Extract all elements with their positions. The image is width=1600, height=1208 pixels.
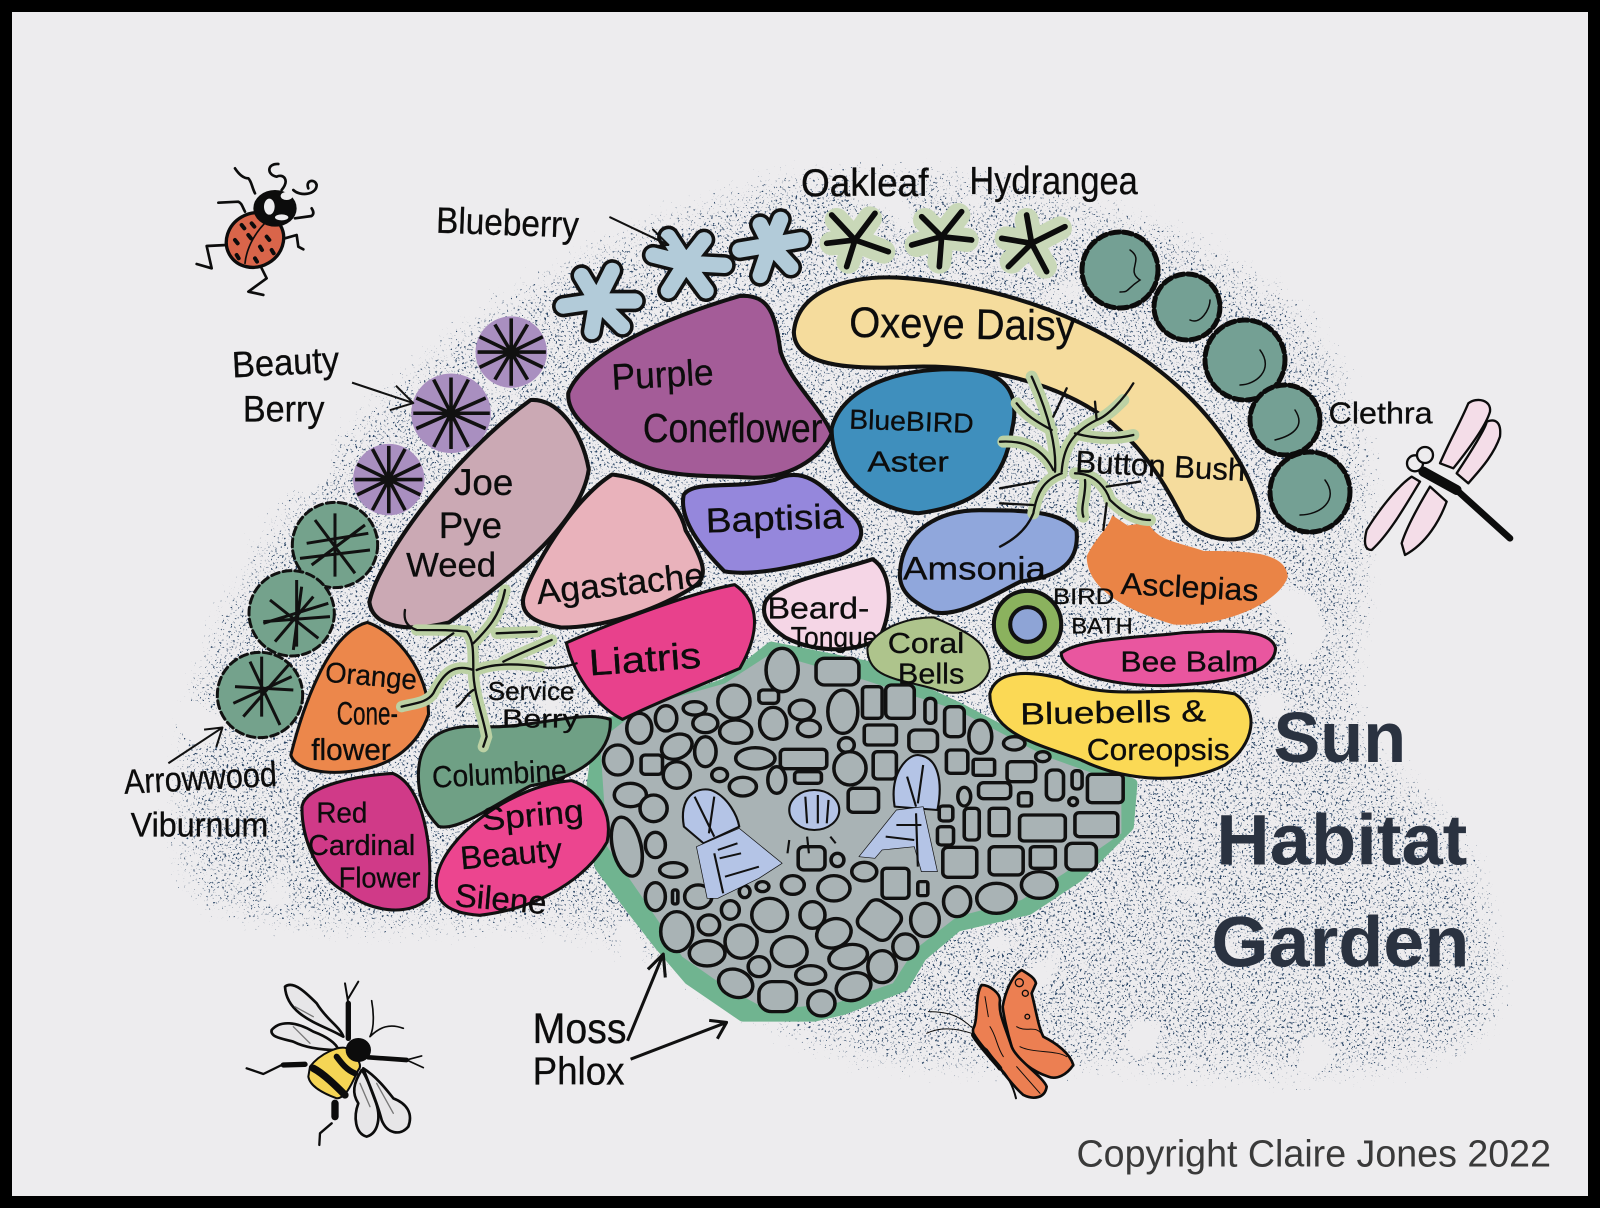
- bed: Bluebird Aster: Aster: [867, 446, 950, 478]
- bed: Red Cardinal Flower: [302, 773, 430, 910]
- bed: Joe Pye Weed: [369, 400, 589, 627]
- bed: Bluebird Aster: [832, 369, 1014, 513]
- bed: Bluebird Aster: BlueBIRD: [849, 404, 974, 439]
- title: Sun: [1273, 698, 1406, 778]
- bed: Purple Coneflower: Purple: [611, 351, 715, 398]
- bed: Spring Beauty Silene: Beauty: [459, 831, 564, 876]
- bed: Joe Pye Weed: Weed: [406, 547, 496, 585]
- left chair: [683, 789, 782, 898]
- label: Moss Phlox with arrows: [533, 954, 727, 1094]
- icon: dragonfly: [1365, 400, 1510, 555]
- shrubs: Beauty Berry: Beauty: [231, 339, 341, 386]
- bird bath: BATH: [1071, 614, 1133, 639]
- bed: Red Cardinal Flower: Flower: [339, 863, 421, 895]
- bed: Bee Balm: Bee Balm: [1120, 646, 1258, 678]
- bed: Amsonia: [900, 510, 1077, 613]
- icon: ladybug: [197, 164, 317, 295]
- shrub: Service Berry branches: [402, 590, 577, 747]
- garden furniture: chairs and table: [683, 755, 940, 898]
- shrubs: Blueberry: Blueberry: [435, 200, 580, 246]
- bed: Red Cardinal Flower: Red: [316, 797, 367, 829]
- label: Service Berry: Berry: [502, 706, 579, 734]
- bed: Purple Coneflower: [568, 296, 832, 478]
- bed: Red Cardinal Flower: Cardinal: [308, 830, 415, 862]
- shrubs: Clethra bushes: [1082, 232, 1350, 532]
- shrubs: Beauty Berry: Berry: [243, 388, 325, 429]
- bed: Agastache: Agastache: [535, 557, 706, 612]
- bed: Coral Bells: Bells: [898, 659, 964, 691]
- label: Oakleaf Hydrangea: Hydrangea: [969, 160, 1138, 203]
- bed: Asclepias: [1087, 515, 1288, 625]
- bed: Coral Bells: [867, 617, 990, 693]
- title: Habitat: [1216, 800, 1467, 880]
- bird bath: [994, 584, 1133, 658]
- bed: Liatris: [566, 585, 755, 719]
- label: Moss Phlox with arrows: Moss: [533, 1005, 627, 1053]
- shrubs: Blueberry: [435, 200, 801, 332]
- title: Garden: [1211, 902, 1469, 982]
- shrub: Button Bush branches: [1000, 377, 1150, 547]
- bed: Orange Coneflower: Orange: [324, 657, 418, 697]
- shrubs: Arrowwood Viburnum bushes: [217, 502, 378, 738]
- right chair: [859, 755, 940, 872]
- label: Arrowwood Viburnum: [123, 728, 278, 845]
- bed: Columbine: [418, 716, 610, 827]
- bed: Oxeye Daisy: Oxeye Daisy: [849, 299, 1077, 351]
- shrubs: Oakleaf Hydrangea stars: [827, 212, 1065, 272]
- shrubs: Beauty Berry: [231, 316, 547, 515]
- bed: Coral Bells: Coral: [888, 628, 964, 660]
- label: Oakleaf Hydrangea: Oakleaf: [801, 162, 929, 205]
- stone wash: [600, 653, 1121, 1010]
- bed: Joe Pye Weed: Joe: [454, 462, 513, 503]
- label: Moss Phlox with arrows: Phlox: [533, 1051, 624, 1094]
- bed: Bee Balm: [1061, 631, 1276, 686]
- bed: Joe Pye Weed: Pye: [439, 505, 502, 546]
- moss phlox ground: [589, 647, 1132, 1017]
- bed: Orange Coneflower: flower: [311, 733, 391, 767]
- bed: Baptisia: [683, 475, 861, 573]
- label: Oakleaf Hydrangea: [801, 160, 1138, 205]
- bed: Beardtongue: [764, 559, 889, 654]
- icon: bumble bee: [247, 982, 423, 1145]
- label: Arrowwood Viburnum: Arrowwood: [123, 756, 278, 802]
- bed: Purple Coneflower: Coneflower: [643, 405, 822, 451]
- bed: Columbine: Columbine: [431, 754, 568, 795]
- bed: Oxeye Daisy: [794, 277, 1258, 540]
- bird bath: BIRD: [1053, 584, 1114, 609]
- bed: Liatris: Liatris: [587, 635, 702, 683]
- table: [787, 790, 839, 853]
- bed: Beardtongue: Beard-: [767, 591, 869, 625]
- label: Service Berry: Service: [488, 678, 574, 706]
- label: Clethra: Clethra: [1329, 396, 1434, 430]
- bed: Agastache: [523, 474, 706, 628]
- title: [1211, 698, 1469, 982]
- label: Service Berry: [488, 678, 579, 734]
- bed: Orange Coneflower: Cone-: [337, 694, 398, 731]
- label: Button Bush: Button Bush: [1075, 444, 1246, 488]
- bed: Bluebells and Coreopsis: [990, 673, 1251, 778]
- label: Arrowwood Viburnum: Viburnum: [131, 807, 268, 845]
- bed: Spring Beauty Silene: Spring: [480, 792, 585, 838]
- bed: Bluebells and Coreopsis: Coreopsis: [1087, 733, 1230, 767]
- bed: Amsonia: Amsonia: [903, 550, 1047, 587]
- stepping stones: [604, 648, 1123, 1016]
- icon: butterfly: [927, 970, 1073, 1098]
- bed: Baptisia: Baptisia: [705, 498, 845, 541]
- copyright: Copyright Claire Jones 2022: [1077, 1132, 1551, 1174]
- bed: Asclepias: Asclepias: [1120, 567, 1259, 608]
- bed: Spring Beauty Silene: Silene: [453, 876, 548, 921]
- bed: Orange Coneflower: [291, 622, 429, 772]
- bed: Beardtongue: Tongue: [791, 622, 878, 654]
- bed: Bluebells and Coreopsis: Bluebells &: [1020, 694, 1206, 731]
- speckled soil texture: [139, 134, 1536, 1114]
- bed: Spring Beauty Silene: [436, 781, 608, 921]
